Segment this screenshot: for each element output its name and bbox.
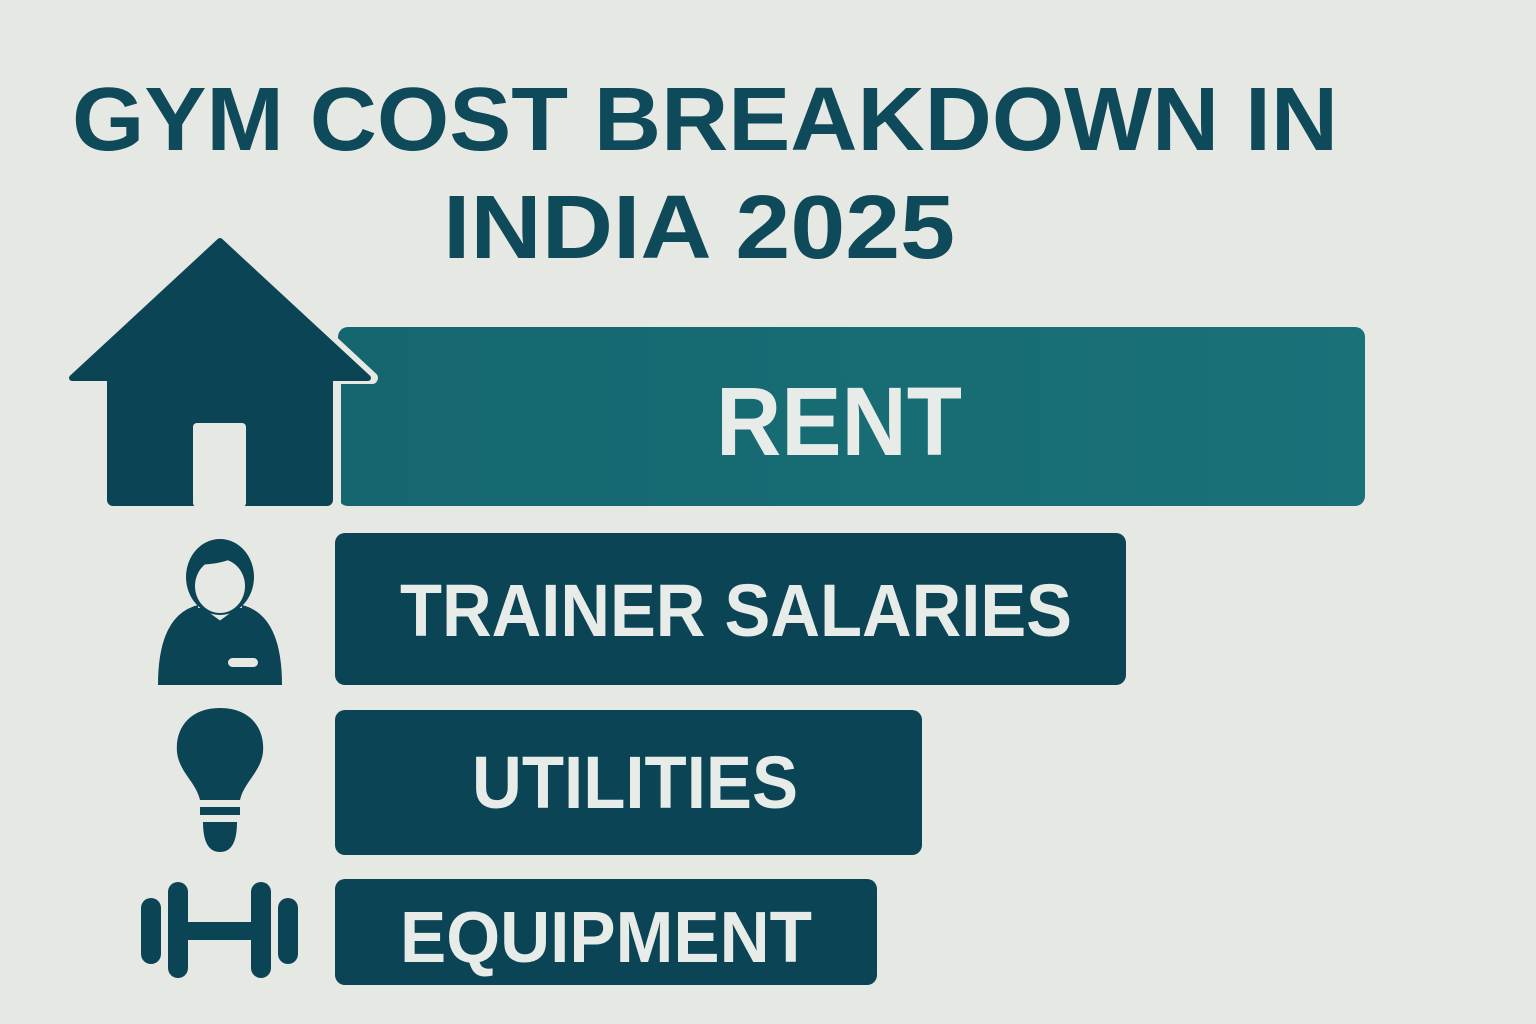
title: GYM COST BREAKDOWN IN: [72, 70, 1338, 170]
icon: light bulb: [177, 708, 263, 852]
bar: trainer salaries: [335, 533, 1126, 685]
icon: trainer person: [158, 539, 282, 685]
bar: rent: [338, 327, 1365, 506]
title: INDIA 2025: [443, 178, 955, 278]
bar: utilities: [335, 710, 922, 855]
icon: dumbbell: [141, 882, 298, 978]
icon: house: [70, 237, 372, 508]
bar: trainer salaries: TRAINER SALARIES: [400, 569, 1072, 652]
bar: rent: RENT: [716, 367, 962, 476]
bar: utilities: UTILITIES: [472, 741, 798, 824]
title: [72, 70, 1338, 278]
bar: equipment: [335, 879, 877, 985]
bar: equipment: EQUIPMENT: [400, 898, 812, 978]
